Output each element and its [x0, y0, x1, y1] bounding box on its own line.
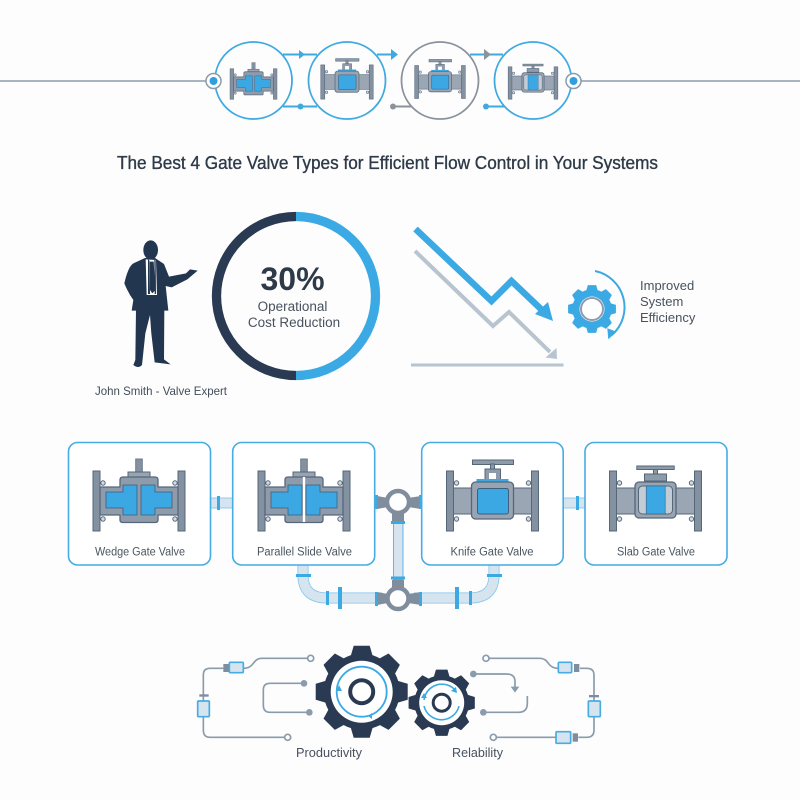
- circuit: left lines: [198, 655, 314, 740]
- donut caption: Operational: [258, 299, 327, 314]
- panel: slab gate valve: [585, 442, 727, 565]
- icon: knife valve grey circle: [402, 42, 478, 119]
- caption: expert name: John Smith - Valve Expert: [95, 384, 228, 398]
- circuit: right lines: [470, 655, 600, 743]
- icon: expert silhouette: [124, 240, 198, 367]
- text: improved system efficiency: Efficiency: [640, 310, 696, 325]
- icon: slab valve circle: [494, 42, 572, 119]
- donut value: 30%: [260, 261, 325, 297]
- label: knife gate valve: Knife Gate Valve: [450, 546, 534, 558]
- icon: knife valve circle: [308, 42, 386, 119]
- label: parallel slide valve: Parallel Slide Valve: [257, 546, 352, 558]
- connector arrows: [283, 49, 505, 110]
- icon: wedge valve circle: [215, 42, 292, 119]
- donut chart: 30%: [216, 216, 376, 376]
- icon: small gear: [409, 670, 475, 736]
- icon: large gear: [316, 646, 408, 738]
- icon: upper pipe junction: [375, 491, 422, 521]
- text: improved system efficiency: Improved: [640, 278, 694, 293]
- label: slab gate valve: Slab Gate Valve: [617, 546, 695, 558]
- pipe: vertical riser: [391, 520, 405, 580]
- pipe: card 3 to card 4: [563, 496, 586, 510]
- label: productivity: Productivity: [296, 745, 362, 760]
- text: improved system efficiency: System: [640, 294, 683, 309]
- pipe: lower right elbow: [414, 565, 502, 609]
- pipe: card 1 to card 2: [210, 496, 234, 510]
- icon: lower pipe junction: [375, 580, 422, 609]
- chart: falling cost arrows: [411, 229, 564, 365]
- pipe network: [210, 491, 586, 609]
- panel: wedge gate valve: [68, 442, 210, 565]
- donut caption: Cost Reduction: [248, 315, 340, 330]
- pipe: lower left elbow: [296, 565, 382, 609]
- icon: efficiency gear: [568, 271, 625, 339]
- panel: parallel slide valve: [233, 442, 375, 565]
- icon: right line node: [566, 74, 581, 88]
- icon: left line node: [206, 74, 221, 88]
- panel: knife gate valve: [422, 442, 563, 565]
- label: reliability: Relability: [452, 745, 503, 760]
- title: The Best 4 Gate Valve Types for Efficient Flow Control in Your Systems: [117, 153, 658, 173]
- label: wedge gate valve: Wedge Gate Valve: [95, 546, 185, 558]
- top valve process strip: [0, 42, 800, 119]
